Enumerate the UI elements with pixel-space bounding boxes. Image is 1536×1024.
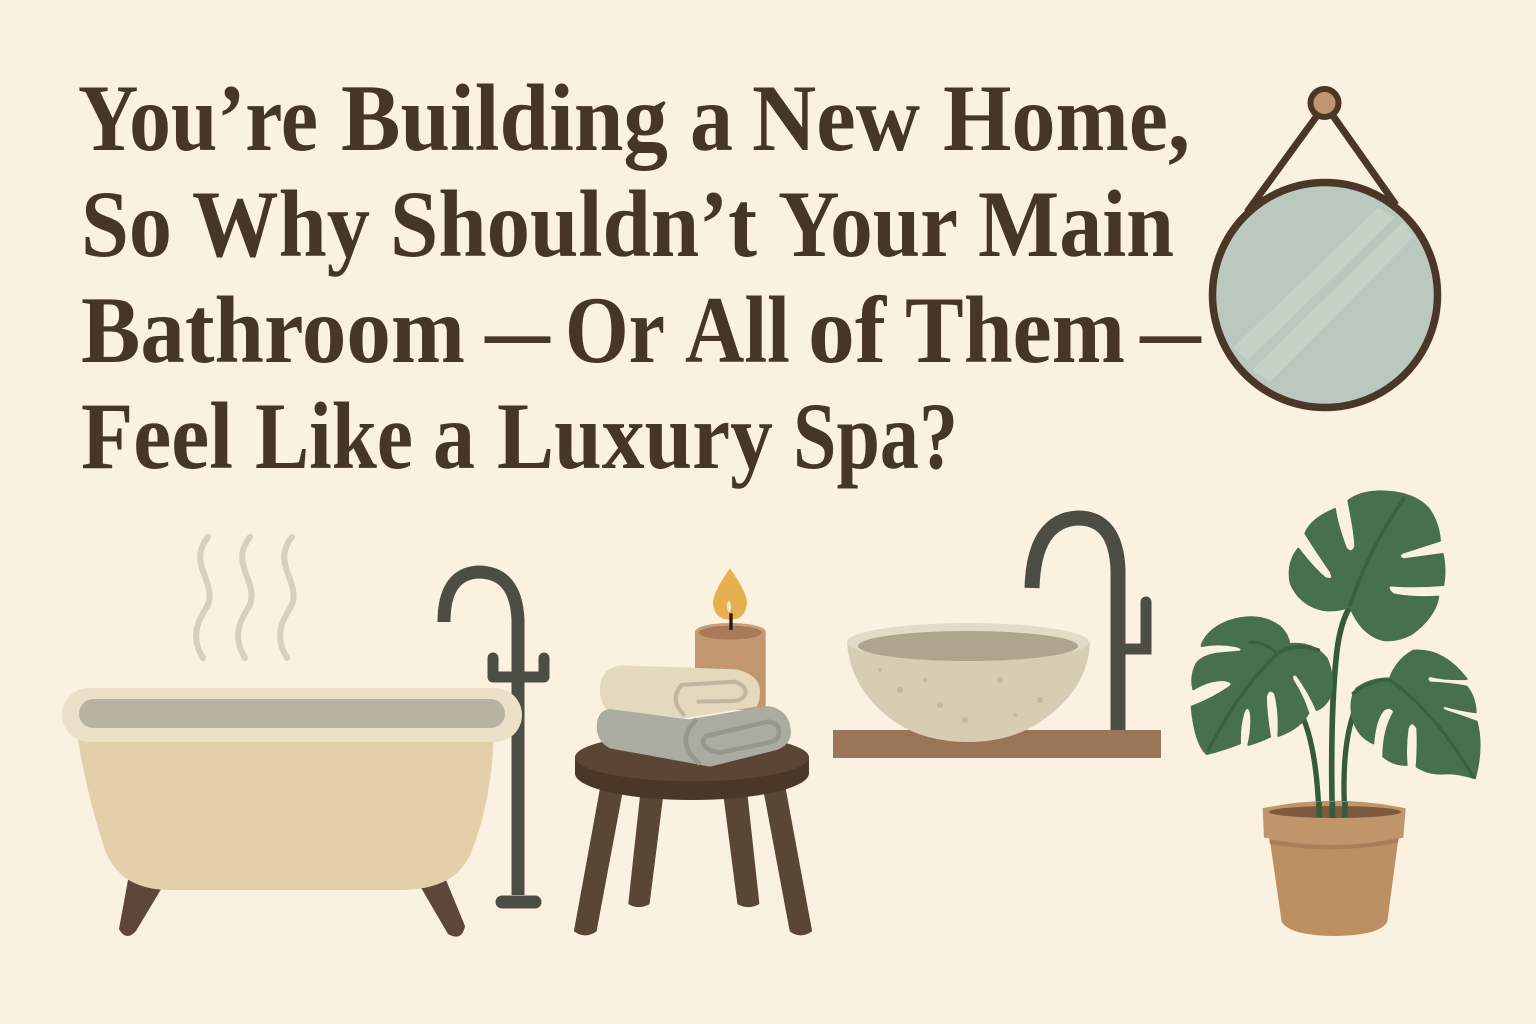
title [78,65,1202,489]
title: Shouldn’t [390,171,757,277]
icon: monstera plant [1192,491,1480,817]
title: So [81,171,172,277]
title: Or [565,277,665,383]
icon: folded towels [597,665,791,767]
icon: terracotta pot [1263,801,1406,936]
title: of [808,277,887,383]
icon: bathtub [62,688,522,937]
title: Home, [943,65,1190,171]
icon: steam [196,537,294,658]
title: You’re [78,65,318,171]
title: New [752,65,920,171]
icon: vanity shelf [833,730,1161,758]
title: Luxury [497,383,773,489]
title: Them [905,277,1125,383]
title: All [685,277,790,383]
title: a [690,65,733,171]
title: — [484,277,551,383]
title: — [1139,277,1202,383]
title: Feel [81,383,233,489]
title: a [433,383,475,489]
icon: floor faucet [444,572,544,902]
title: Your [778,171,958,277]
icon: sink faucet [1032,518,1146,730]
icon: round mirror [1212,89,1438,408]
title: Like [255,383,413,489]
title: Spa? [793,383,958,489]
title: Building [341,65,668,171]
icon: candle [695,568,766,710]
title: Main [978,171,1174,277]
title: Bathroom [81,277,465,383]
title: Why [192,171,370,277]
icon: stool [575,733,811,934]
icon: stone basin [847,623,1090,742]
